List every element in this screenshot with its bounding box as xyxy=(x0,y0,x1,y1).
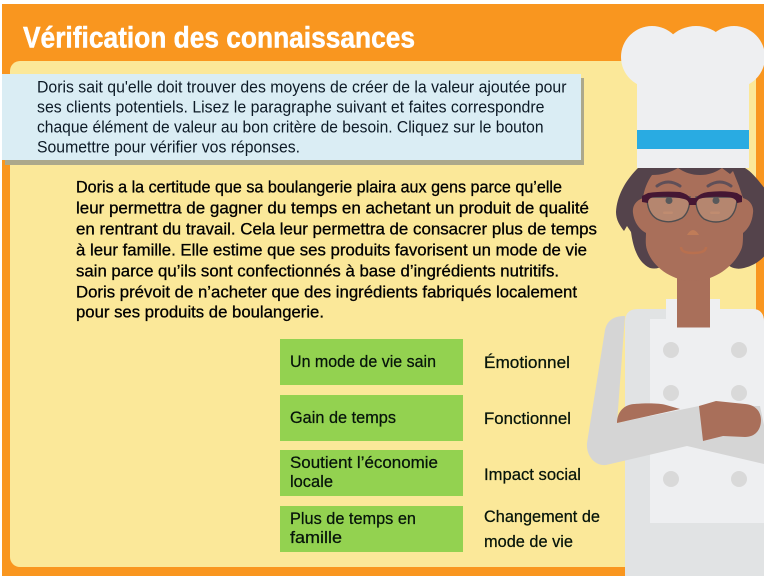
nose xyxy=(687,230,699,235)
crossed arms xyxy=(587,316,764,465)
draggable: soutient l'économie locale: Soutient l’économie xyxy=(290,453,438,472)
scenario paragraph: Doris prévoit de n’acheter que des ingrédients fabriqués localement xyxy=(76,284,577,302)
title: Vérification des connaissances xyxy=(23,22,415,54)
label: impact social: Impact social xyxy=(484,465,581,484)
instructions box: ses clients potentiels. Lisez le paragraphe suivant et faites correspondre xyxy=(37,98,544,116)
draggable: plus de temps en famille: Plus de temps en xyxy=(290,509,416,528)
illustration: chef xyxy=(587,26,766,576)
instructions box: Doris sait qu'elle doit trouver des moyens de créer de la valeur ajoutée pour xyxy=(37,78,567,96)
chef hat xyxy=(621,26,765,168)
smile xyxy=(681,247,706,253)
label: changement de mode de vie: Changement de xyxy=(484,507,600,526)
scenario paragraph: pour ses produits de boulangerie. xyxy=(76,304,324,322)
instructions box xyxy=(2,74,584,165)
neck xyxy=(677,278,710,328)
draggable: un mode de vie sain xyxy=(280,339,463,385)
face xyxy=(633,168,753,281)
eyebrows xyxy=(657,182,731,186)
label: fonctionnel: Fonctionnel xyxy=(484,409,571,428)
draggable: un mode de vie sain: Un mode de vie sain xyxy=(290,352,436,371)
label: changement de mode de vie xyxy=(484,507,600,551)
draggable: soutient l'économie locale: locale xyxy=(290,472,333,491)
scenario paragraph: Doris a la certitude que sa boulangerie plaira aux gens parce qu’elle xyxy=(76,178,562,196)
draggable: gain de temps xyxy=(280,395,463,441)
instructions box: chaque élément de valeur au bon critère de besoin. Cliquez sur le bouton xyxy=(37,118,544,136)
scenario paragraph: sain parce qu’ils sont confectionnés à base d’ingrédients nutritifs. xyxy=(76,262,559,280)
hair xyxy=(616,168,766,269)
draggable: plus de temps en famille: famille xyxy=(290,528,342,547)
chef jacket xyxy=(625,299,764,576)
draggable: gain de temps: Gain de temps xyxy=(290,408,396,427)
scenario paragraph xyxy=(76,178,597,322)
draggable: soutient l'économie locale xyxy=(280,450,463,496)
glasses xyxy=(642,191,742,222)
instructions box: Soumettre pour vérifier vos réponses. xyxy=(37,138,300,156)
scenario paragraph: en rentrant du travail. Cela leur permettra de consacrer plus de temps xyxy=(76,220,597,238)
scenario paragraph: à leur famille. Elle estime que ses produits favorisent un mode de vie xyxy=(76,242,587,260)
draggable: plus de temps en famille xyxy=(280,506,463,552)
label: changement de mode de vie: mode de vie xyxy=(484,532,573,551)
label: émotionnel: Émotionnel xyxy=(484,353,570,372)
scenario paragraph: leur permettra de gagner du temps en achetant un produit de qualité xyxy=(76,200,589,218)
